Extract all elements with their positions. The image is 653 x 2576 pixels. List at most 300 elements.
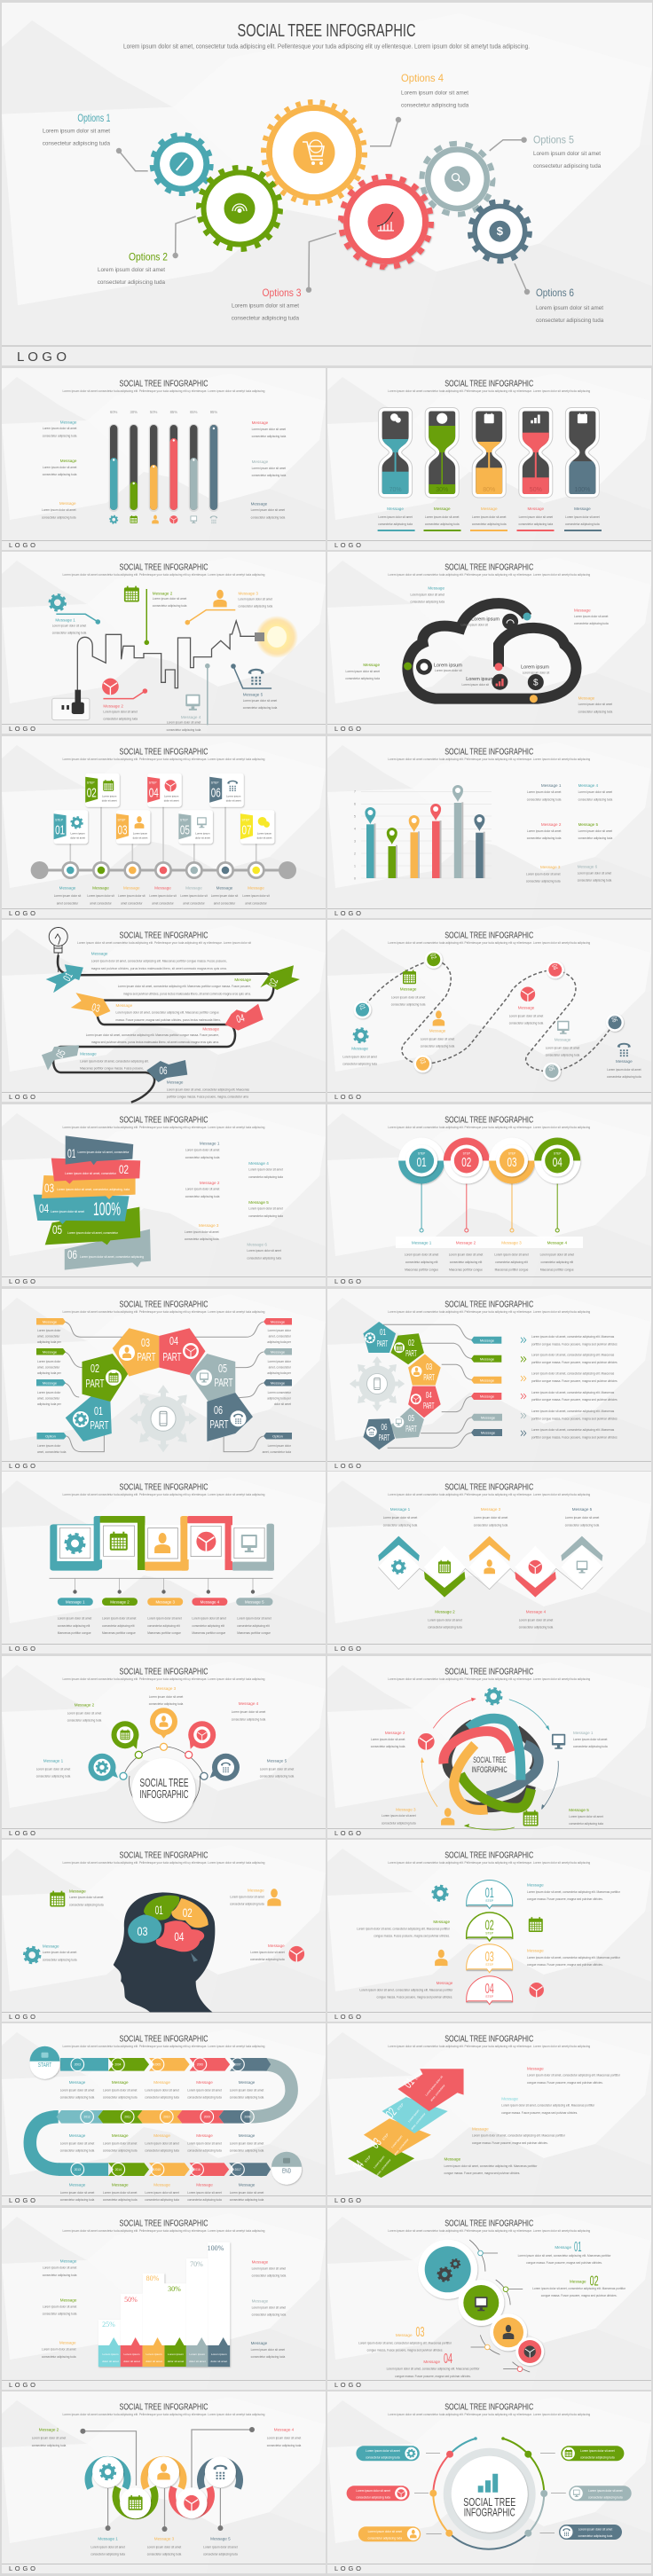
icon: gear [50, 595, 65, 610]
text: message 01: Message [91, 952, 108, 956]
column values: 80% [146, 2274, 160, 2282]
icon: monitor [185, 695, 201, 711]
bubble slate [209, 1754, 240, 1781]
text: message 1: Lorem ipsum dolor sit amet [36, 1767, 70, 1771]
card step 04 [147, 774, 182, 807]
heading: SOCIAL TREE INFOGRAPHIC [445, 2033, 533, 2044]
text: message orange: Message [248, 1889, 264, 1893]
leader dots [96, 619, 236, 694]
text: message orange: Message [59, 2341, 76, 2345]
text: message 4: consectetur adipiscing tuda [167, 728, 201, 732]
pill slate [559, 2525, 622, 2540]
text: message 2: Lorem ipsum dolor sit amet [185, 1188, 220, 1191]
text: message orange: Lorem ipsum dolor sit amet [42, 2348, 76, 2352]
dome 04 [467, 1976, 513, 2005]
icon: gear [433, 1886, 447, 1900]
footer logo: L O G O [334, 1277, 361, 1285]
banner labels: Lorem ipsum dolor sit amet, consectetur, adipiscing, tuda [57, 1188, 130, 1191]
bar chart: 4 [354, 827, 356, 830]
text: message red: Lorem ipsum dolor sit amet, consectetur adipiscing elit. Maecenas porttitor [527, 2074, 621, 2077]
text: message 5: consectetur adipiscing tuda [243, 706, 278, 710]
part labels: 06 [382, 1423, 388, 1433]
year labels: 2009 [204, 2115, 210, 2118]
icon: pie [102, 679, 119, 695]
text: left notes: adipiscing tuda per [37, 1371, 62, 1375]
text: option 03: Message [396, 2333, 413, 2337]
side tags: Message [271, 1320, 286, 1323]
text: message green: consectetur adipiscing tuda [345, 677, 380, 680]
node labels: Lorem ipsum dolor sit [461, 623, 488, 626]
ribbon numbers: 03 [90, 1001, 101, 1015]
brain labels [137, 1903, 193, 1944]
text: message orange [230, 1889, 264, 1906]
text: message teal: Message [60, 2259, 77, 2264]
text: message 3: Lorem ipsum dolor sit amet [494, 1253, 529, 1257]
text: message 5: consectetur adipiscing tuda [578, 836, 612, 840]
arrow labels: STEP [414, 2072, 422, 2081]
footer logo: L O G O [334, 1645, 361, 1653]
text: descriptions: Lorem ipsum dolor sit amet, consectetur adipiscing elit. Maecenas [531, 1354, 615, 1357]
text: message 3 [494, 1241, 529, 1271]
column text: Lorem ipsum [124, 2352, 140, 2356]
footer logo: L O G O [9, 1277, 35, 1285]
column text: Lorem ipsum [168, 2352, 184, 2356]
text: message grey [252, 459, 286, 477]
arrow labels: 04 [350, 2157, 366, 2173]
circle teal [418, 2240, 477, 2299]
text: message 2: Lorem ipsum dolor sit amet [527, 829, 562, 833]
stems [420, 1180, 559, 1232]
text: message 5: Message 5 [243, 693, 264, 697]
text: message 4 [248, 1161, 283, 1179]
text: message 5: Lorem ipsum dolor sit amet [203, 2545, 238, 2549]
text: message 1 [52, 618, 87, 635]
text: row 3 messages: Lorem ipsum dolor sit amet [60, 2191, 94, 2195]
text: left notes: amet, consectetur [37, 1334, 60, 1338]
callout: options 6: consectetur adipiscing tuda [536, 318, 604, 324]
pill labels: Message 1 [66, 1599, 85, 1604]
text: step 02 [357, 1920, 451, 1937]
text: message orange: Message [472, 2127, 489, 2132]
text: step 01 [527, 1882, 621, 1901]
text: message red: Message [527, 2067, 544, 2071]
banner labels: Lorem ipsum dolor sit amet, consectetur adipiscing [80, 1255, 144, 1259]
chevrons [521, 1338, 526, 1436]
node labels: Lorem ipsum dolor sit [462, 683, 489, 687]
heading: SOCIAL TREE INFOGRAPHIC [119, 1850, 208, 1861]
text: row 1 messages: Message [69, 2080, 86, 2085]
arrow labels: STEP [364, 2155, 372, 2164]
banner labels: 05 [52, 1222, 62, 1237]
column values: 50% [124, 2296, 138, 2304]
heading: SOCIAL TREE INFOGRAPHIC [119, 562, 208, 573]
gear: options 5 [422, 144, 493, 215]
text: row 2 messages: Lorem ipsum dolor sit amet [145, 2141, 179, 2145]
text: right notes: adipiscing tuda per [267, 1371, 292, 1375]
text: message teal [410, 585, 445, 603]
subtitle: Lorem ipsum dolor sit amet consectetur tuda adipiscing elit. Pellentesque your tuda adipiscing elit uy ellentesque. Lorem ipsum dolor sit ametyt tuda adipiscing [62, 389, 264, 393]
text: message teal: Lorem ipsum dolor sit amet [342, 1055, 377, 1058]
banner labels: Lorem ipsum dolor sit amet, consectetur [78, 1151, 130, 1154]
text: message grey: Lorem ipsum dolor sit amet [252, 2305, 286, 2309]
tube chart: 95% [210, 410, 217, 414]
text: row 2 messages: Lorem ipsum dolor sit amet [60, 2141, 94, 2145]
text: row 2 messages: consectetur adipiscing tuda [60, 2148, 95, 2152]
panel: slide folded boxes [2, 1472, 326, 1653]
title: SOCIAL TREE INFOGRAPHIC [238, 20, 416, 41]
pill teal [356, 2446, 420, 2461]
hourglass slate [564, 412, 600, 496]
wavy road [53, 955, 273, 1103]
hourglass orange: 80% [483, 487, 495, 493]
text: message 03: Lorem ipsum dolor sit amet, consectetur adipiscing elit. Maecenas porttitor congue [115, 1011, 219, 1015]
text: message 03 [115, 1003, 221, 1022]
text: message 5 [565, 1507, 600, 1527]
icon: pie [289, 1946, 304, 1962]
year labels: 2003 [75, 2063, 81, 2067]
text: message slate [251, 2341, 285, 2359]
text: message 5: consectetur adipiscing tuda [260, 1774, 295, 1778]
text: message 5: Lorem ipsum dolor sit amet [578, 829, 612, 833]
pill grey: Lorem ipsum dolor sit amet [588, 2489, 623, 2493]
panel: slide tube gauges [2, 368, 326, 550]
text: option 04: congue massa. Fusce posuere, magna sed pulvinar ultricies. [395, 2375, 471, 2378]
card step 07: STEP [241, 818, 250, 821]
pill slate: Lorem ipsum dolor sit amet [578, 2528, 612, 2532]
text: message 4: consectetur adipiscing elit [541, 1261, 573, 1264]
subtitle: Lorem ipsum dolor sit amet consectetur tuda adipiscing elit. Pellentesque your tuda adipiscing elit uy ellentesque. Lorem ipsum dolor sit ametyt tuda adipiscing [62, 572, 264, 577]
banner labels: 06 [67, 1247, 77, 1261]
text: message red: Message [518, 1005, 535, 1009]
column values: 100% [208, 2244, 224, 2252]
text: message red: Message [574, 608, 591, 612]
text: message grey: Message [252, 459, 269, 464]
text: message red [252, 420, 286, 438]
arrow labels: Lorem ipsum [390, 2134, 404, 2148]
numbered stops [353, 951, 624, 1080]
panel: slide linked rings [2, 2391, 326, 2573]
text: message 4: consectetur adipiscing tuda [519, 1626, 554, 1630]
text: message grey [252, 2299, 286, 2317]
pill green [561, 2446, 624, 2461]
arrow labels: 03 [367, 2135, 384, 2151]
text: message 4: Message 4 [239, 1701, 259, 1706]
part labels: 01 [380, 1328, 386, 1338]
card step 07: Lorem ipsum [257, 831, 272, 835]
side tags: Option [45, 1433, 56, 1439]
text: box descriptions: consectetur adipiscing elit [58, 1624, 90, 1628]
part labels: 04 [169, 1334, 178, 1347]
text: option 02: 02 [590, 2274, 599, 2289]
node rings [478, 2250, 523, 2372]
pill red: consectetur adipiscing tuda [356, 2495, 390, 2499]
icon: person [267, 1889, 281, 1906]
footer logo: L O G O [9, 2564, 35, 2572]
text: message teal: Lorem ipsum dolor sit amet [411, 593, 445, 596]
callout: options 3: Options 3 [263, 287, 302, 299]
text: box descriptions: Maecenas porttitor congue [192, 1631, 225, 1635]
light bulb [255, 616, 298, 658]
text: message 6 [578, 865, 612, 882]
text: message orange: Lorem ipsum dolor sit amet [421, 1037, 454, 1041]
panel: slide six part column: PART [423, 1373, 435, 1383]
ribbon numbers: 04 [235, 1011, 246, 1025]
text: row 1 messages: consectetur adipiscing tuda [145, 2095, 179, 2099]
card step 03: dolor sit amet [133, 836, 148, 839]
text: row 3 messages: Message [69, 2182, 86, 2187]
text: row 1 messages: consectetur adipiscing tuda [230, 2095, 264, 2099]
text: left notes: Lorem ipsum dolor [37, 1444, 61, 1448]
text: message 6: Message 6 [578, 865, 598, 869]
callout: options 2: Lorem ipsum dolor sit amet [98, 267, 165, 273]
icon row [110, 515, 217, 523]
text: message teal: consectetur adipiscing tuda [43, 1958, 77, 1961]
text: message orange [421, 1028, 455, 1048]
subtitle: Lorem ipsum dolor sit amet, consectetur tuda adipiscing elit. Pellentesque your tuda adipiscing elit uy ellentesque. Lorem ipsum dolor sit ametyt tuda adipiscing. [123, 43, 530, 50]
side tags: Message [480, 1338, 495, 1342]
text: timeline messages: amet consectetur [152, 901, 175, 905]
callout: options 5: Options 5 [533, 133, 574, 145]
part labels: 02 [90, 1362, 99, 1375]
step circle 01 [398, 1137, 445, 1183]
text: message green: Message [60, 459, 77, 463]
text: timeline messages: amet consectetur [57, 901, 79, 905]
text: box descriptions: Maecenas porttitor congue [102, 1631, 136, 1635]
chevron icons [392, 1559, 587, 1574]
pill labels [58, 1598, 273, 1606]
pill slate: consectetur adipiscing tuda [578, 2534, 613, 2538]
text: message 3: Message 3 [501, 1241, 522, 1245]
step circle 02: 02 [461, 1155, 471, 1170]
heading: SOCIAL TREE INFOGRAPHIC [445, 2402, 533, 2413]
text: message red: Lorem ipsum dolor sit amet [252, 428, 286, 431]
text: hourglass messages: Message [527, 507, 545, 511]
heading: SOCIAL TREE INFOGRAPHIC [445, 2218, 533, 2228]
panel: slide woven knot [327, 1656, 651, 1838]
text: message 4: Lorem ipsum dolor sit amet [519, 1619, 553, 1622]
cloud road path [407, 603, 576, 699]
text: message 3 [474, 1507, 508, 1527]
footer logo: L O G O [334, 1093, 361, 1101]
text: message 2: consectetur adipiscing tuda [32, 2444, 67, 2447]
arc nodes [120, 1743, 208, 1779]
part labels: 03 [141, 1336, 150, 1349]
start badge: START [38, 2062, 52, 2069]
node labels [434, 617, 549, 687]
stop badges: 05 [547, 1064, 556, 1072]
column text: dolor sit amet [146, 2360, 162, 2363]
icon: pie [529, 1983, 544, 1998]
connectors [383, 1324, 474, 1448]
text: message green [391, 986, 426, 1006]
stop badges: 02 [429, 953, 438, 961]
text: descriptions: Lorem ipsum dolor sit amet, consectetur adipiscing elit. Maecenas [531, 1410, 615, 1413]
text: message red [527, 2067, 621, 2085]
text: row 1 messages: Message [239, 2080, 256, 2085]
banner labels [39, 1146, 144, 1261]
pill grey: consectetur adipiscing tuda [588, 2495, 623, 2499]
text: message 4: Message 4 [578, 783, 599, 788]
text: message 3: Lorem ipsum dolor sit amet [526, 872, 561, 876]
text: row 1 messages: consectetur adipiscing tuda [187, 2095, 222, 2099]
part labels: PART [209, 1418, 229, 1431]
power socket [52, 690, 90, 720]
text: message slate [251, 501, 285, 519]
text: message 1: Lorem ipsum dolor sit amet [405, 1253, 438, 1257]
card step 02: Lorem ipsum [102, 795, 117, 798]
text: message 1: consectetur adipiscing tuda [527, 797, 562, 801]
banner labels: Lorem ipsum dolor sit amet, consectetur [65, 1172, 117, 1175]
gear: options 2 [199, 168, 280, 249]
gear: options 6: $ [497, 224, 504, 238]
box icons [66, 1532, 257, 1553]
step circle 01: STEP [418, 1151, 425, 1155]
text: message orange: Message [578, 695, 595, 700]
year labels: 2011 [124, 2115, 130, 2118]
text: option 01: congue massa. Fusce posuere, magna sed pulvinar ultricies. [526, 2261, 602, 2265]
text: message green: consectetur adipiscing tuda [69, 1903, 104, 1906]
footer logo: L O G O [9, 1462, 35, 1470]
year labels: 2004 [114, 2063, 122, 2067]
bubble red [188, 1721, 216, 1749]
panel: slide descending circles [327, 2208, 651, 2390]
pill labels: Message 5 [245, 1599, 264, 1604]
text: message orange: consectetur adipiscing tuda [421, 1044, 455, 1048]
text: message teal: consectetur adipiscing tuda [410, 600, 445, 603]
text: box descriptions: Maecenas porttitor congue [237, 1631, 271, 1635]
text: message orange: Lorem ipsum dolor sit amet [42, 508, 76, 512]
text: option 01: Lorem ipsum dolor sit amet, consectetur adipiscing elit. Maecenas porttitor [518, 2254, 611, 2258]
subtitle: Lorem ipsum dolor sit amet consectetur tuda adipiscing elit. Pellentesque your tuda adipiscing elit uy ellentesque. Lorem ipsum dolor sit ametyt tuda adipiscing [62, 2412, 264, 2416]
side tags: Message [480, 1394, 495, 1399]
text: message 3: consectetur adipiscing elit [495, 1261, 528, 1264]
icon: person [213, 590, 227, 607]
text: message 1 [527, 783, 562, 801]
text: message 02: Message [234, 978, 251, 982]
text: message 2 green [153, 591, 187, 608]
panel: slide dome steps [327, 1840, 651, 2022]
panel: slide snake timeline [2, 2023, 326, 2205]
part labels: 04 [426, 1391, 432, 1401]
text: message slate: consectetur adipiscing tuda [607, 1075, 641, 1079]
text: row 3 messages: consectetur adipiscing tuda [60, 2198, 95, 2202]
text: timeline messages: Message [154, 885, 171, 890]
heading: SOCIAL TREE INFOGRAPHIC [445, 1114, 533, 1125]
text: message green: Lorem ipsum dolor sit amet [43, 2305, 77, 2308]
arrow labels: 01 [400, 2075, 417, 2091]
column text: dolor sit amet [211, 2360, 227, 2363]
text: hourglass messages: Lorem ipsum dolor sit amet [519, 515, 553, 519]
year labels: 2012 [84, 2115, 90, 2118]
text: right notes: dolor sit amet [274, 1402, 291, 1406]
banner labels: 04 [39, 1201, 49, 1215]
text: message 1 [573, 1731, 608, 1748]
step circle 02 [444, 1137, 490, 1183]
panel: slide city skyline [2, 552, 326, 734]
icon: light bulb outline [49, 928, 67, 972]
subtitle: Lorem ipsum dolor sit amet consectetur tuda adipiscing elit. Pellentesque your tuda adipiscing elit uy ellentesque. Lorem ipsum dolor sit ametyt tuda adipiscing [388, 1492, 590, 1496]
text: hourglass messages: Message [387, 507, 404, 511]
text: message 2 red: Lorem ipsum dolor sit amet [103, 711, 138, 714]
text: descriptions: porttitor congue massa. Fusce posuere, magna sed pulvinar ultricies [531, 1435, 618, 1439]
text: message 5: Message 5 [578, 822, 599, 827]
text: message 1: Message 1 [200, 1142, 220, 1146]
side tags: Message [271, 1380, 286, 1386]
tube chart: 65% [190, 410, 198, 414]
text: message 05: Lorem ipsum dolor sit amet, consectetur adipiscing elit. [80, 1059, 149, 1063]
text: message 6: Lorem ipsum dolor sit amet [578, 871, 611, 875]
side tags [471, 1337, 502, 1436]
text: message 1: consectetur adipiscing tuda [36, 1774, 71, 1778]
text: message grey: Lorem ipsum dolor sit amet [252, 467, 286, 470]
text: message 1: Lorem ipsum dolor sit amet [527, 790, 562, 794]
subtitle: Lorem ipsum dolor sit amet consectetur tuda adipiscing elit. Pellentesque your tuda adipiscing elit uy ellentesque. Lorem ipsum dolor sit [77, 940, 252, 945]
text: hourglass messages: consectetur adipiscing tuda [565, 522, 600, 526]
card step 04: STEP [149, 781, 157, 785]
card step 05: dolor sit amet [195, 836, 210, 839]
text: message red: Lorem ipsum dolor sit amet [509, 1014, 543, 1017]
text: message 1 [185, 1142, 220, 1159]
heading: SOCIAL TREE INFOGRAPHIC [445, 1481, 533, 1492]
text: row 1 messages: Message [112, 2080, 129, 2085]
text: message slate: Message [251, 2341, 268, 2345]
text: message red: consectetur adipiscing tuda [252, 435, 286, 438]
bar chart: 6 [354, 802, 356, 805]
panel: slide bar chart [327, 736, 651, 918]
chevron diamonds [378, 1536, 602, 1598]
panel: slide cloud road [327, 552, 651, 734]
text: message red: consectetur adipiscing tuda [574, 622, 609, 625]
leader lines [56, 589, 271, 725]
text: message teal [342, 1046, 377, 1065]
text: row 1 messages [60, 2080, 264, 2099]
text: message 1 [36, 1758, 71, 1778]
timeline axis [31, 806, 296, 879]
text: message 6: consectetur adipiscing tuda [578, 878, 612, 882]
text: message 5 [578, 822, 612, 840]
text: message slate: Message [616, 1059, 633, 1064]
text: message teal: Message [428, 585, 445, 590]
text: hourglass messages: Message [481, 507, 498, 511]
text: message green: Message [60, 2297, 77, 2302]
text: left notes: Lorem ipsum dolor [37, 1360, 61, 1363]
text: message 3 [382, 1807, 416, 1825]
text: message red [574, 608, 609, 625]
text: left notes: amet, consectetur [37, 1396, 60, 1400]
arrow labels: Lorem ipsum [373, 2155, 386, 2169]
text: row 3 messages: Lorem ipsum dolor sit amet [145, 2191, 179, 2195]
text: message 5 [248, 1200, 283, 1218]
text: message 4: consectetur adipiscing tuda [232, 1717, 266, 1721]
text: row 2 messages: Lorem ipsum dolor sit amet [230, 2141, 264, 2145]
text: row 3 messages: Lorem ipsum dolor sit amet [230, 2191, 264, 2195]
ring centres [92, 2456, 236, 2518]
year labels: 2015 [154, 2168, 161, 2172]
text: message 4 [519, 1610, 554, 1630]
bar chart: 3 [354, 839, 356, 843]
text: message 5 [203, 2536, 238, 2556]
tube chart [109, 410, 218, 512]
text: message 3 [526, 865, 561, 883]
text: message teal: Message [60, 420, 77, 424]
part labels: PART [85, 1377, 105, 1390]
stem rail [50, 1578, 273, 1594]
side tags: Message [480, 1356, 495, 1361]
bubble orange [150, 1708, 177, 1739]
text: row 1 messages: Message [153, 2080, 170, 2085]
brain labels: 02 [183, 1905, 193, 1920]
text: message 06 [167, 1080, 249, 1098]
